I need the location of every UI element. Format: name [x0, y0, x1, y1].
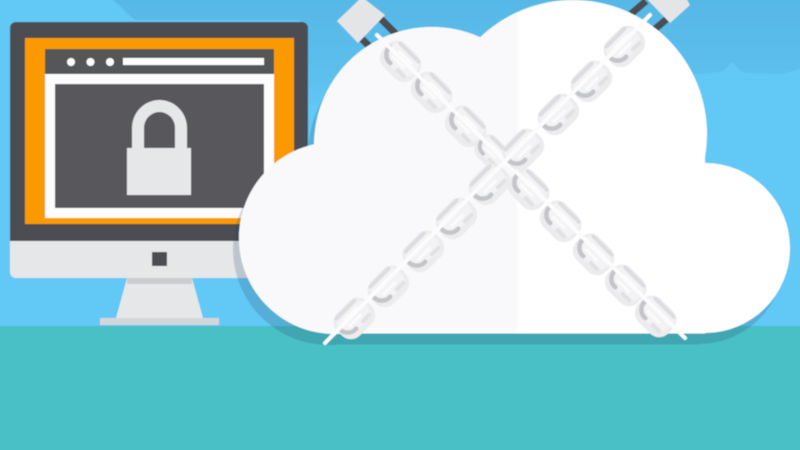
- monitor power button: [152, 252, 167, 266]
- chain: top-left to bottom-right: [374, 35, 685, 343]
- cloud: [239, 0, 790, 334]
- monitor stand: [100, 278, 219, 325]
- sky background: [0, 0, 800, 330]
- browser window: [45, 49, 274, 218]
- chain: top-right to bottom-left: [325, 15, 651, 345]
- ground: [0, 326, 800, 450]
- monitor frame: [10, 22, 308, 241]
- monitor: [10, 22, 308, 325]
- darker sky clouds band: [110, 0, 800, 105]
- address bar: [123, 58, 264, 65]
- padlock icon: [127, 100, 191, 195]
- orange screen: [25, 38, 294, 224]
- left padlock behind chain: [337, 0, 396, 50]
- right padlock behind chain: [631, 0, 690, 29]
- cloud shadow: [233, 11, 784, 345]
- window dots: [67, 58, 114, 66]
- monitor chin: [10, 241, 308, 278]
